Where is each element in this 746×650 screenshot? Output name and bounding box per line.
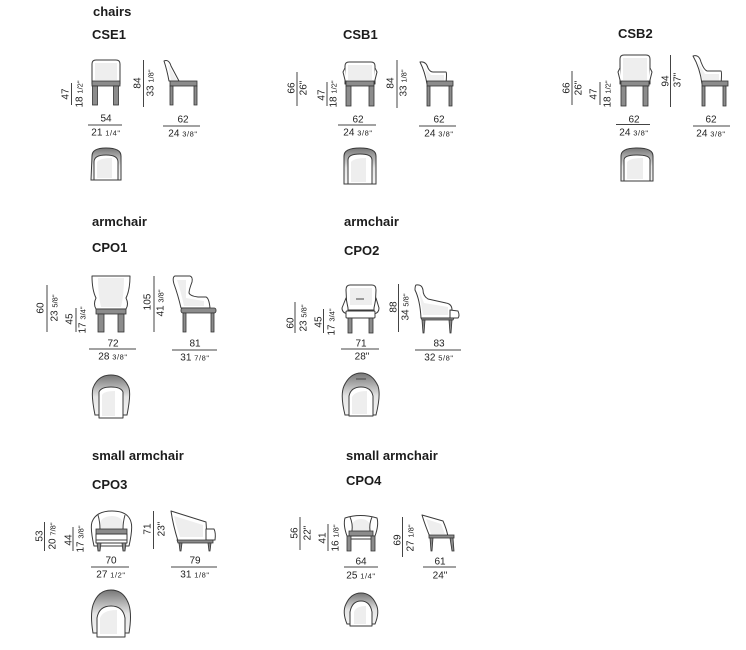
- panel: CPO1: [36, 240, 217, 418]
- back height 56: 56: [290, 527, 300, 539]
- height 105: [142, 276, 166, 332]
- seat height 41: 16 1/8": [330, 524, 342, 552]
- seat height 45: [64, 306, 88, 334]
- seat height 41: 41: [318, 532, 328, 544]
- height 84: [386, 60, 410, 108]
- arm height 60: 23 5/8": [50, 294, 60, 322]
- seat height 45: 17 3/4": [78, 306, 88, 334]
- side view: [164, 61, 197, 105]
- back height 56: [290, 517, 314, 550]
- depth 79: 79: [189, 556, 201, 566]
- width 64: 25 1/4": [346, 570, 376, 582]
- seat height 44: 44: [64, 534, 74, 546]
- front view: [342, 285, 379, 333]
- depth 61: 61: [434, 556, 446, 568]
- width 70: 27 1/2": [96, 570, 126, 580]
- height 94: 37": [672, 72, 684, 87]
- arm height 60: 60: [36, 302, 46, 314]
- arm height 66: [562, 71, 584, 105]
- height 71: [142, 511, 168, 549]
- seat height 47: 18 1/2": [602, 80, 614, 108]
- width 72: 72: [107, 338, 119, 350]
- heading: small armchair: small armchair: [92, 448, 184, 463]
- width 54: 54: [100, 114, 112, 124]
- height 105: 41 3/8": [156, 289, 166, 316]
- width 64: [344, 556, 378, 582]
- front view: [618, 55, 652, 106]
- arm height 60: 23 5/8": [298, 304, 310, 332]
- plan view: [92, 590, 130, 637]
- height 84: 84: [132, 77, 144, 89]
- plan view: [621, 148, 653, 181]
- back height 53: 20 7/8": [48, 522, 58, 550]
- front view: [343, 62, 377, 106]
- model name CPO1: CPO1: [92, 240, 127, 255]
- width 64: 64: [355, 556, 367, 568]
- seat height 47: 47: [60, 88, 72, 100]
- heading: chairs: chairs: [93, 4, 131, 19]
- height 71: 71: [142, 523, 154, 535]
- seat height 47: 18 1/2": [328, 80, 340, 108]
- panel: CSB1: [286, 27, 456, 184]
- side view: [171, 511, 215, 551]
- height 88: [388, 284, 412, 332]
- seat height 45: [314, 308, 338, 336]
- height 69: 27 1/8": [406, 524, 416, 552]
- height 84: 33 1/8": [146, 69, 156, 96]
- front view: [91, 511, 132, 551]
- seat height 47: 18 1/2": [74, 80, 86, 108]
- height 94: 94: [660, 75, 672, 87]
- seat height 47: [316, 80, 340, 108]
- side view: [422, 515, 454, 551]
- side view: [693, 56, 728, 106]
- depth 62: 24 3/8": [424, 128, 454, 140]
- width 72: 28 3/8": [98, 352, 128, 362]
- seat height 47: [60, 80, 86, 108]
- height 84: 84: [386, 77, 396, 89]
- seat height 47: 47: [316, 89, 328, 101]
- front view: [344, 516, 378, 551]
- plan view: [91, 148, 121, 180]
- model name CPO2: CPO2: [344, 243, 379, 258]
- plan view: [342, 373, 379, 416]
- height 69: 69: [392, 534, 404, 546]
- width 62: [338, 114, 376, 138]
- side view: [415, 285, 459, 333]
- height 71: 23": [156, 521, 168, 536]
- panel: CPO3: [34, 477, 217, 637]
- arm height 60: 60: [286, 317, 296, 329]
- depth 61: 24": [433, 570, 448, 582]
- width 72: [89, 338, 136, 362]
- depth 81: 81: [189, 338, 201, 350]
- panel: CPO4: [290, 473, 456, 626]
- depth 62: 62: [705, 114, 717, 126]
- width 54: 21 1/4": [91, 128, 121, 138]
- heading: armchair: armchair: [344, 214, 399, 229]
- arm height 66: [286, 72, 310, 106]
- model name CSB1: CSB1: [343, 27, 378, 42]
- seat height 44: 17 3/8": [76, 525, 86, 552]
- seat height 45: 45: [314, 316, 324, 328]
- arm height 66: 26": [298, 80, 310, 95]
- arm height 66: 66: [562, 82, 572, 94]
- side view: [173, 276, 216, 332]
- panel: CSE1: [60, 27, 200, 180]
- depth 81: 31 7/8": [180, 352, 210, 364]
- back height 53: 53: [34, 530, 46, 542]
- width 62: [616, 114, 650, 138]
- depth 62: [693, 114, 730, 140]
- seat height 45: 17 3/4": [326, 308, 338, 336]
- width 70: [91, 556, 129, 580]
- depth 62: 24 3/8": [168, 128, 198, 140]
- width 54: [88, 114, 122, 138]
- depth 62: [163, 114, 200, 140]
- plan view: [92, 375, 130, 418]
- model name CSE1: CSE1: [92, 27, 126, 42]
- seat height 45: 45: [64, 313, 76, 325]
- width 62: 62: [352, 114, 364, 126]
- depth 79: 31 1/8": [180, 570, 210, 580]
- depth 81: [172, 338, 217, 364]
- depth 62: [419, 114, 456, 140]
- front view: [92, 60, 120, 105]
- height 88: 34 5/8": [400, 293, 412, 320]
- depth 61: [423, 556, 456, 582]
- side view: [420, 62, 453, 106]
- model name CSB2: CSB2: [618, 26, 653, 41]
- width 70: 70: [105, 556, 117, 566]
- arm height 66: 66: [286, 82, 298, 94]
- heading: small armchair: small armchair: [346, 448, 438, 463]
- back height 53: [34, 522, 58, 551]
- plan view: [344, 148, 376, 184]
- height 105: 105: [142, 293, 154, 310]
- width 62: 24 3/8": [619, 128, 649, 138]
- front view: [92, 276, 130, 332]
- width 62: 62: [628, 114, 640, 126]
- plan view: [344, 593, 378, 626]
- seat height 47: 47: [588, 88, 600, 100]
- width 71: 28": [355, 352, 370, 362]
- depth 83: 83: [433, 338, 445, 350]
- arm height 60: [286, 302, 310, 333]
- height 69: [392, 517, 416, 557]
- arm height 60: [36, 285, 60, 332]
- seat height 47: [588, 80, 614, 108]
- depth 62: 24 3/8": [696, 128, 726, 140]
- width 71: 71: [355, 338, 367, 350]
- panel: CSB2: [562, 26, 730, 181]
- depth 83: [415, 338, 461, 364]
- seat height 41: [318, 524, 342, 552]
- width 62: 24 3/8": [343, 128, 373, 138]
- panel: CPO2: [286, 243, 461, 416]
- depth 79: [171, 556, 217, 580]
- depth 83: 32 5/8": [424, 352, 454, 364]
- back height 56: 22": [302, 525, 314, 540]
- model name CPO4: CPO4: [346, 473, 382, 488]
- heading: armchair: armchair: [92, 214, 147, 229]
- depth 62: 62: [177, 114, 189, 126]
- height 94: [660, 55, 684, 107]
- arm height 66: 26": [574, 80, 584, 95]
- height 84: 33 1/8": [398, 69, 410, 96]
- width 71: [341, 338, 379, 362]
- depth 62: 62: [433, 114, 445, 126]
- model name CPO3: CPO3: [92, 477, 127, 492]
- height 88: 88: [388, 301, 400, 313]
- height 84: [132, 60, 156, 107]
- seat height 44: [64, 525, 86, 552]
